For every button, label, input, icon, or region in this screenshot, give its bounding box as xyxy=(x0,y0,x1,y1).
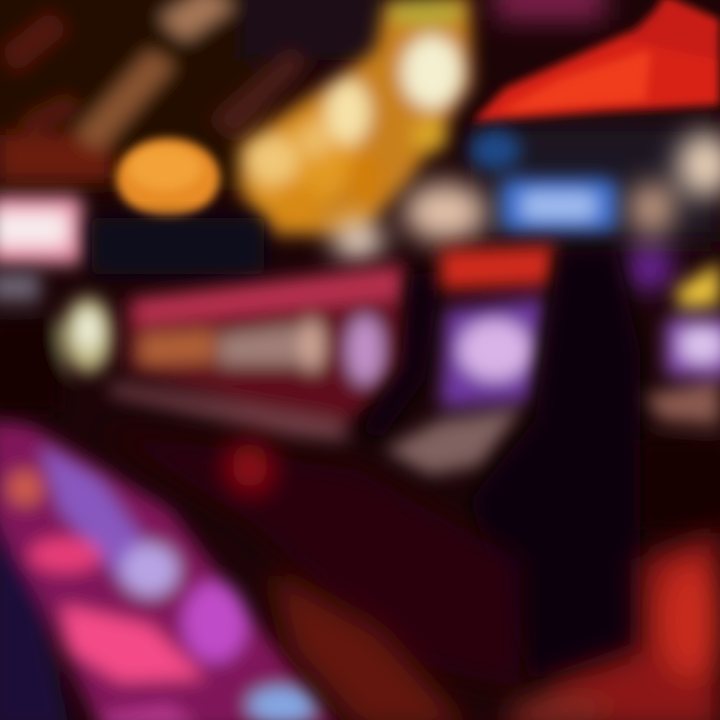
blue screen xyxy=(469,130,618,232)
red canopy xyxy=(472,0,720,122)
right-edge machine xyxy=(640,262,720,530)
centre lower shadow xyxy=(100,430,520,690)
golden illuminated sign xyxy=(238,0,472,235)
centre backlit cluster xyxy=(332,133,720,290)
dark divider cabinet xyxy=(360,270,440,440)
top magenta glow xyxy=(480,0,720,242)
white-pink sign at left xyxy=(0,196,82,264)
patterned carpet, left xyxy=(0,420,340,720)
slot machine with purple screen xyxy=(385,245,555,475)
left mid area xyxy=(0,272,113,412)
row of slot machines xyxy=(110,262,410,442)
tall dark cabinet xyxy=(470,250,640,680)
orange globe lamp xyxy=(116,138,220,218)
red carpet, right xyxy=(270,530,720,720)
dark band under lamp xyxy=(92,218,264,274)
ceiling area xyxy=(0,0,380,190)
